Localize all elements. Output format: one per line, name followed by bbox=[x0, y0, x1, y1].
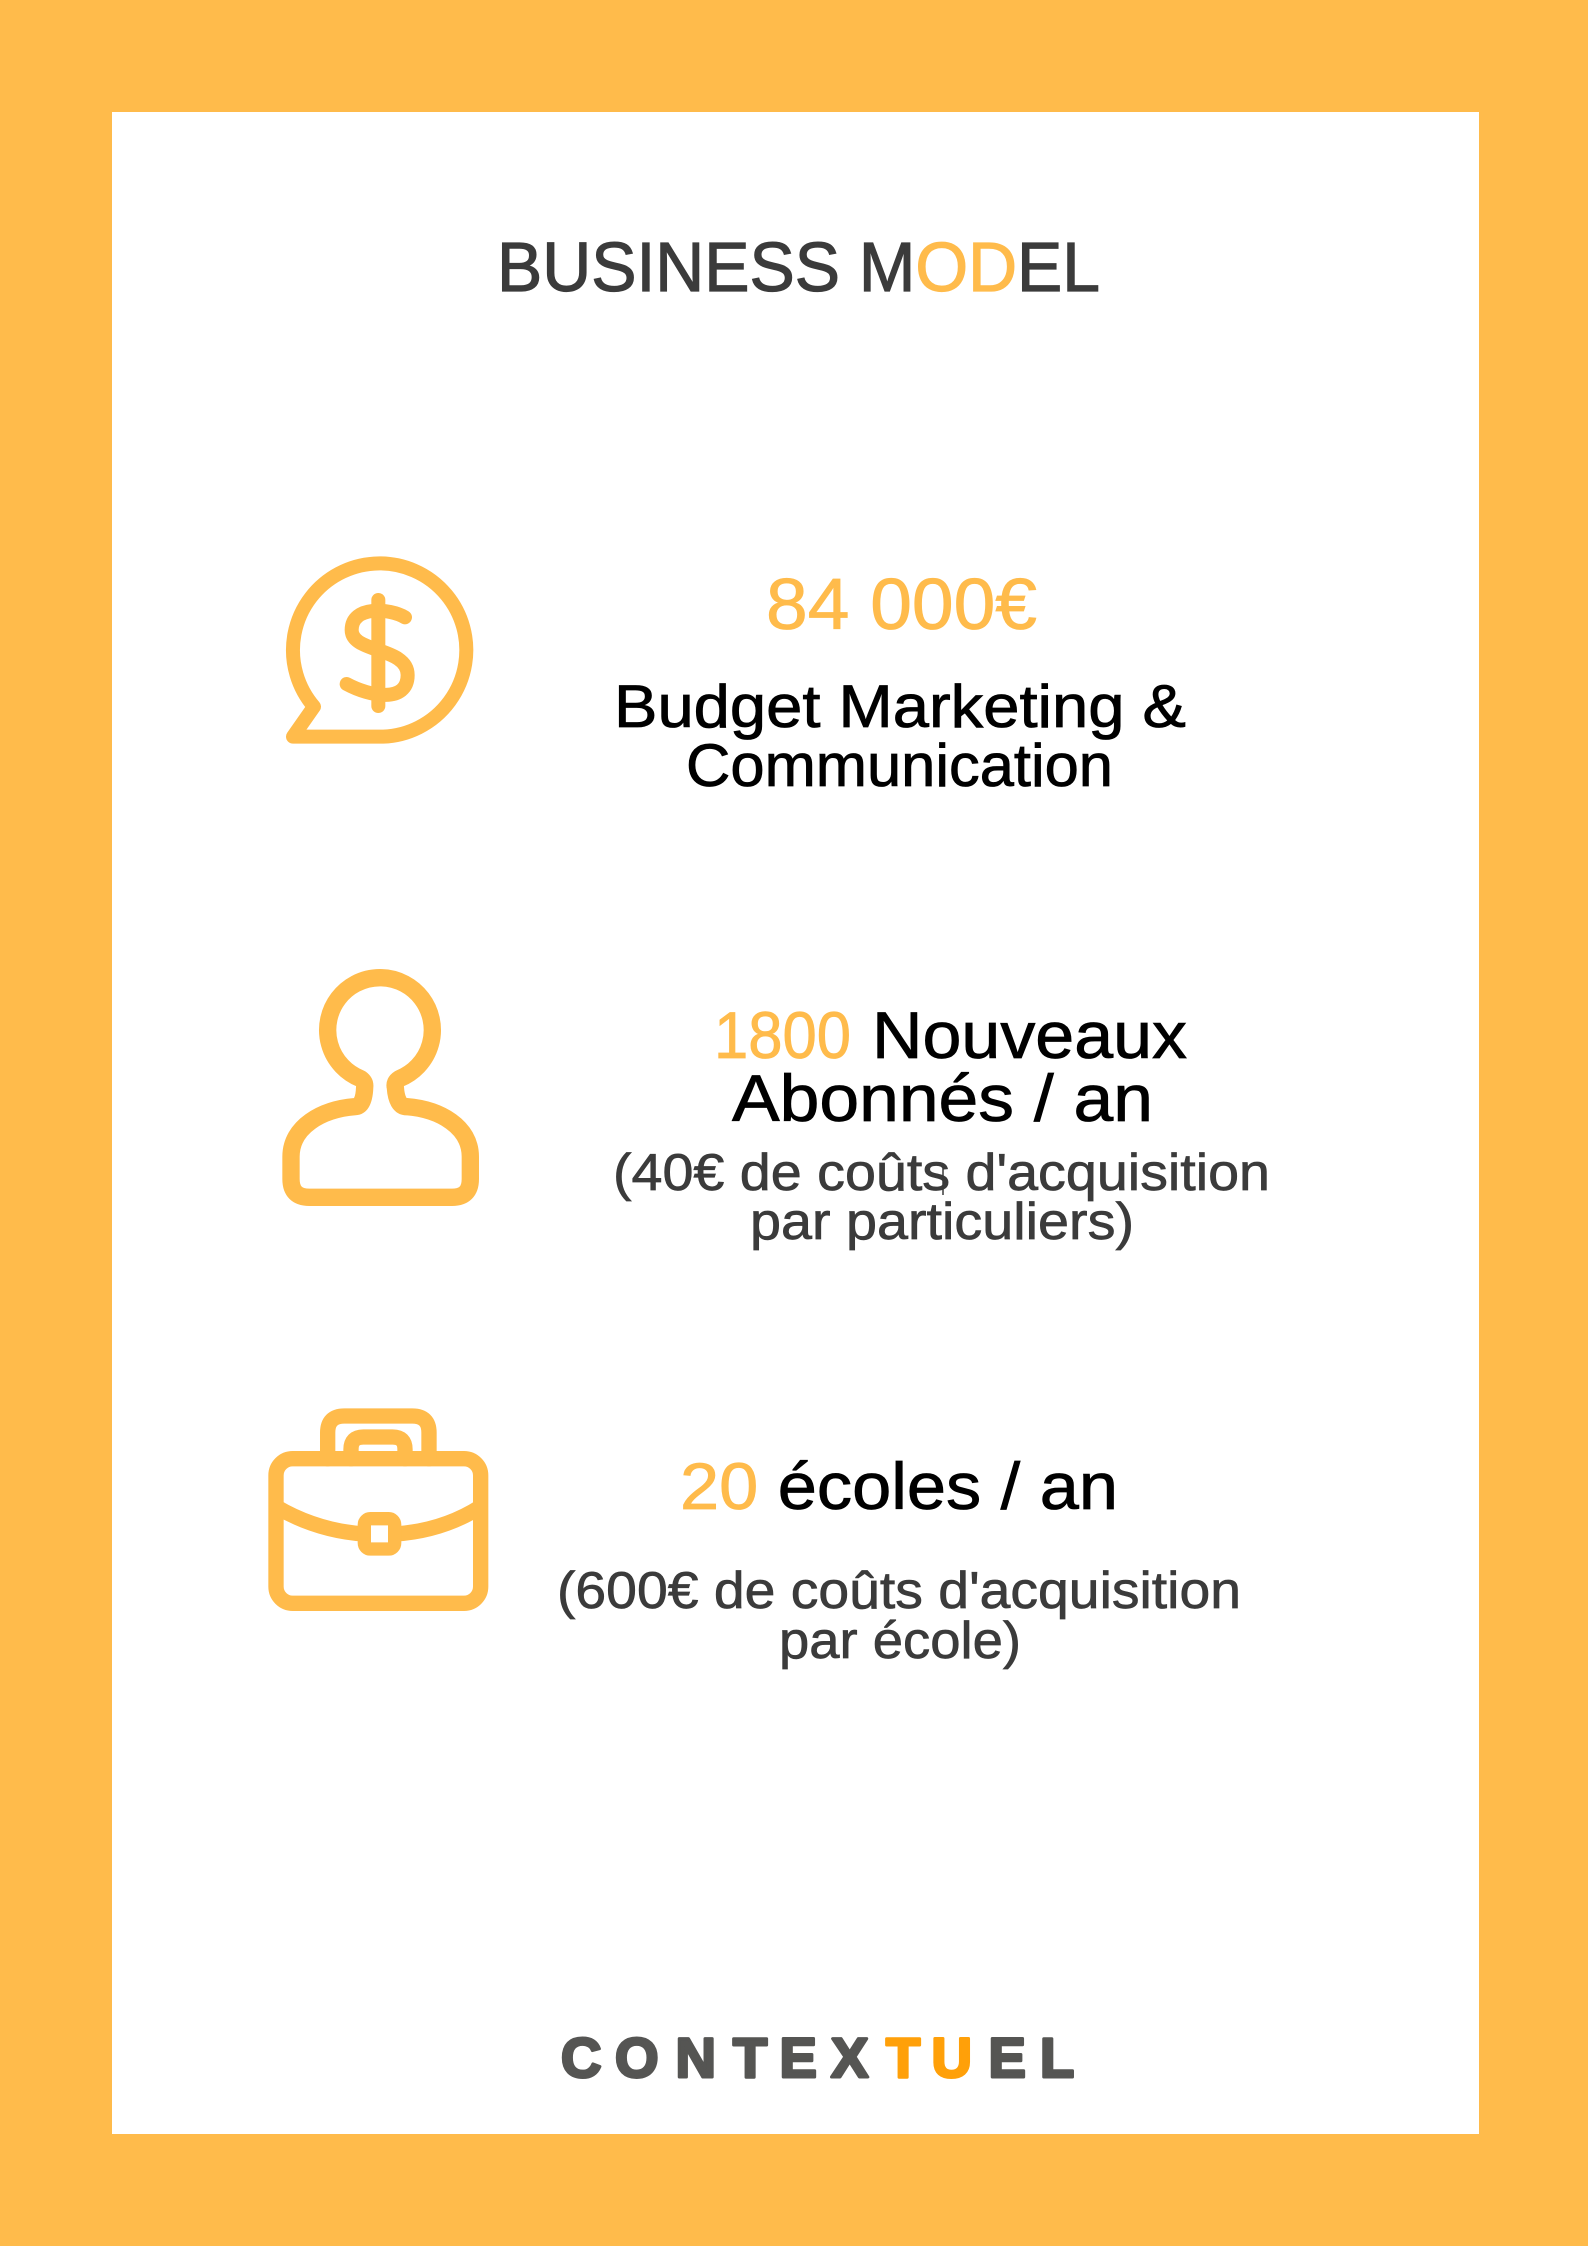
label: budget marketing and communication: Communication bbox=[686, 732, 1113, 799]
note: 40 euros acquisition cost: par particuliers) bbox=[750, 1193, 1134, 1251]
headline: 1800 nouveaux abonnes par an: Abonnés / an bbox=[732, 1061, 1153, 1135]
amount: 84 000 euros: 84 000€ bbox=[766, 565, 1037, 645]
headline: 20 ecoles par an: 20 écoles / an bbox=[680, 1449, 1118, 1523]
white content panel bbox=[112, 112, 1479, 2134]
icon: dollar speech bubble bbox=[293, 563, 466, 737]
title: BUSINESS MODEL bbox=[497, 228, 1100, 306]
logo: contextuel: CONTEX TU EL bbox=[561, 2026, 1074, 2089]
note: 600 euros acquisition cost bbox=[557, 1562, 1241, 1670]
note: 600 euros acquisition cost: par école) bbox=[779, 1612, 1021, 1670]
row 1: marketing budget bbox=[293, 563, 1186, 799]
icon: briefcase bbox=[276, 1416, 481, 1603]
headline: 1800 nouveaux abonnes par an: 1800 bbox=[714, 998, 851, 1072]
headline: 1800 nouveaux abonnes par an bbox=[714, 998, 1187, 1135]
note: 40 euros acquisition cost: (40€ de coûts d'acquisition bbox=[613, 1144, 1270, 1202]
row 3: schools bbox=[276, 1416, 1241, 1670]
note: 40 euros acquisition cost bbox=[613, 1144, 1270, 1251]
note: 600 euros acquisition cost: (600€ de coûts d'acquisition bbox=[557, 1562, 1241, 1620]
row 2: new subscribers bbox=[291, 978, 1270, 1251]
label: budget marketing and communication: Budget Marketing & bbox=[614, 673, 1186, 740]
icon: person bbox=[291, 978, 470, 1197]
label: budget marketing and communication bbox=[614, 673, 1186, 799]
headline: 1800 nouveaux abonnes par an: Nouveaux bbox=[872, 998, 1187, 1072]
